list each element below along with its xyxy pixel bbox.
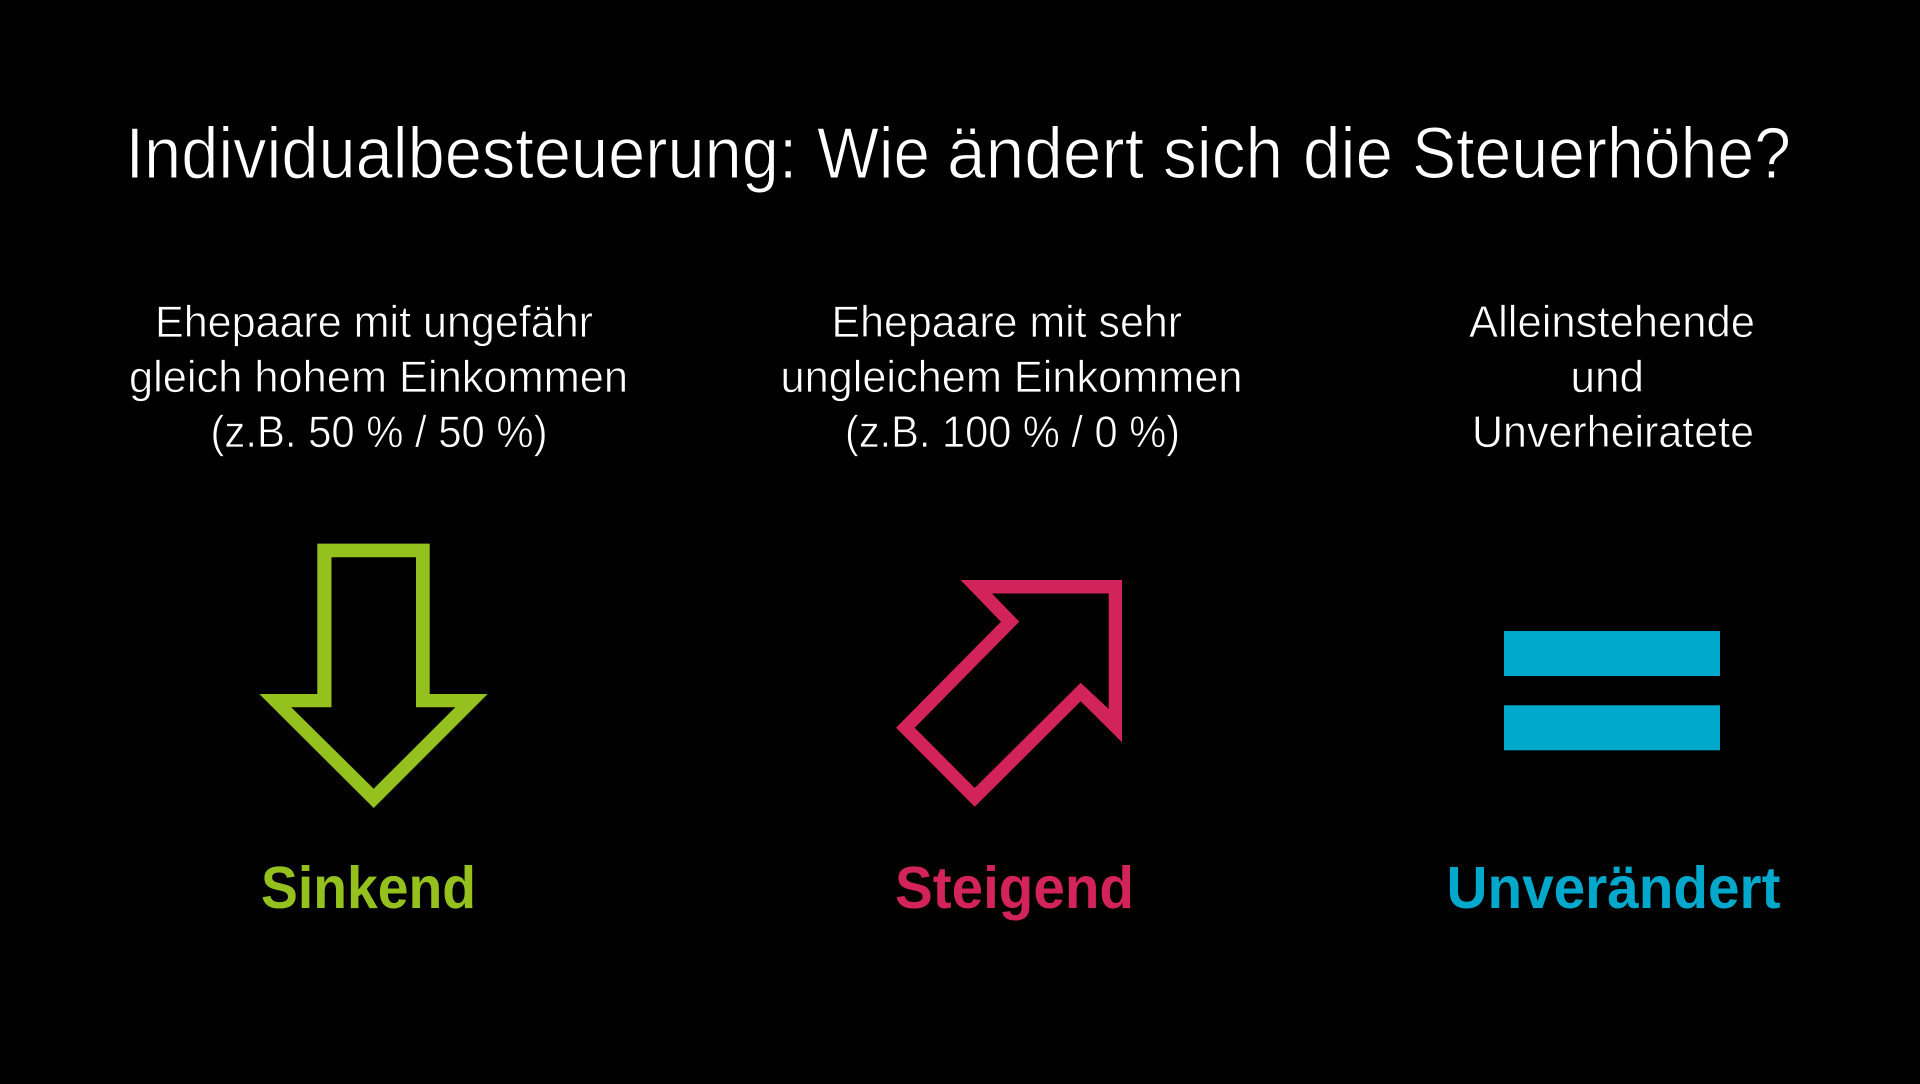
panel: unverändert xyxy=(1446,298,1780,921)
title: die xyxy=(1303,114,1393,194)
text block: Alleinstehende und Unverheiratete: und xyxy=(1570,353,1644,402)
text block: Ehepaare ungleiches Einkommen xyxy=(780,298,1242,457)
text block: Ehepaare gleich hohes Einkommen xyxy=(129,298,628,457)
icon: arrow down xyxy=(259,544,488,808)
label: Steigend: Steigend xyxy=(895,855,1134,921)
title: sich xyxy=(1163,114,1283,194)
title xyxy=(126,114,1791,194)
text block: Ehepaare ungleiches Einkommen: ungleichem Einkommen xyxy=(780,353,1242,402)
text block: Ehepaare gleich hohes Einkommen: (z.B. 50 % / 50 %) xyxy=(210,408,548,457)
text block: Alleinstehende und Unverheiratete xyxy=(1469,298,1755,457)
panel: sinkend xyxy=(129,298,628,921)
label: Unverändert: Unverändert xyxy=(1446,855,1780,921)
title: ändert xyxy=(947,114,1144,194)
text block: Ehepaare gleich hohes Einkommen: gleich hohem Einkommen xyxy=(129,353,628,402)
text block: Alleinstehende und Unverheiratete: Alleinstehende xyxy=(1469,298,1755,347)
title: Wie xyxy=(817,114,930,194)
panel: steigend xyxy=(780,298,1242,921)
icon: arrow up right xyxy=(896,580,1122,807)
text block: Ehepaare ungleiches Einkommen: Ehepaare mit sehr xyxy=(832,298,1182,347)
text block: Alleinstehende und Unverheiratete: Unverheiratete xyxy=(1472,408,1754,457)
label: Sinkend: Sinkend xyxy=(261,855,476,921)
title: Individualbesteuerung: xyxy=(126,114,798,194)
title: Steuerhöhe? xyxy=(1412,114,1791,194)
text block: Ehepaare ungleiches Einkommen: (z.B. 100 % / 0 %) xyxy=(845,408,1180,457)
text block: Ehepaare gleich hohes Einkommen: Ehepaare mit ungefähr xyxy=(155,298,593,347)
icon: equals sign xyxy=(1504,631,1720,750)
